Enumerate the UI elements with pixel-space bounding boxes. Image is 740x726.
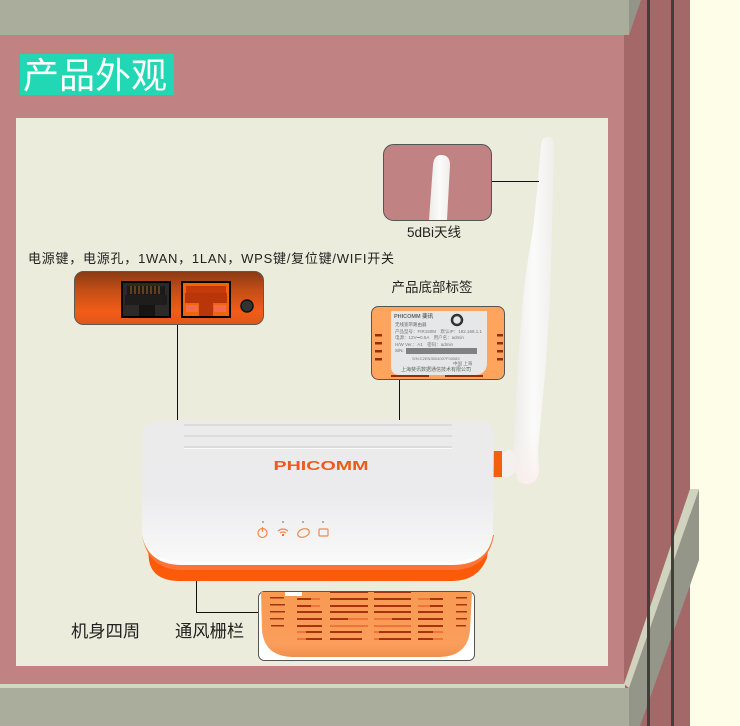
callout: bottom label: PHICOMM 斐讯 (394, 312, 434, 320)
callout: bottom label: 无线宽带路由器 (395, 321, 427, 328)
callout: antenna (384, 144, 539, 240)
port: LAN (182, 282, 230, 317)
callout: bottom label: 上海斐讯数据通信技术有限公司 (401, 366, 471, 373)
router indicator lights (258, 527, 328, 539)
label: 机身四周: 机身四周 (71, 621, 140, 641)
router logo: PHICOMM (274, 459, 368, 473)
callout: bottom label: S/N: (395, 348, 404, 353)
vertical dark lines (647, 0, 674, 726)
callout: bottom label: 电源：12V⎓0.5A 用户名：admin (395, 334, 464, 341)
router base (148, 550, 488, 581)
top ledge (0, 0, 641, 35)
callout: bottom label: 产品型号：FIR150M 默认IP：192.168.1.1 (395, 328, 483, 335)
title: 产品外观 (23, 55, 167, 96)
router (142, 421, 494, 581)
callout: bottom label: H/W Ver.：A1 密码：admin (395, 341, 454, 348)
callout: ports: 电源键，电源孔，1WAN，1LAN，WPS键/复位键/WIFI开关 (28, 251, 394, 266)
antenna (493, 137, 554, 484)
callout: bottom label (372, 279, 504, 420)
router top shell (142, 421, 494, 565)
main panel (16, 118, 608, 666)
callout: bottom label: 中国 上海 (453, 360, 473, 367)
callout: bottom label: 产品底部标签 (392, 279, 473, 295)
callout: antenna: 5dBi天线 (407, 225, 461, 240)
bottom right ledge (0, 489, 699, 726)
label: 通风栅栏: 通风栅栏 (175, 621, 244, 641)
callout: bottom label: S/N:C2EN3504007F00083 (412, 356, 460, 361)
callout: ports (28, 251, 394, 420)
port: WAN (122, 282, 170, 317)
button: WPS (241, 300, 253, 312)
callout: vent grille (196, 581, 474, 660)
